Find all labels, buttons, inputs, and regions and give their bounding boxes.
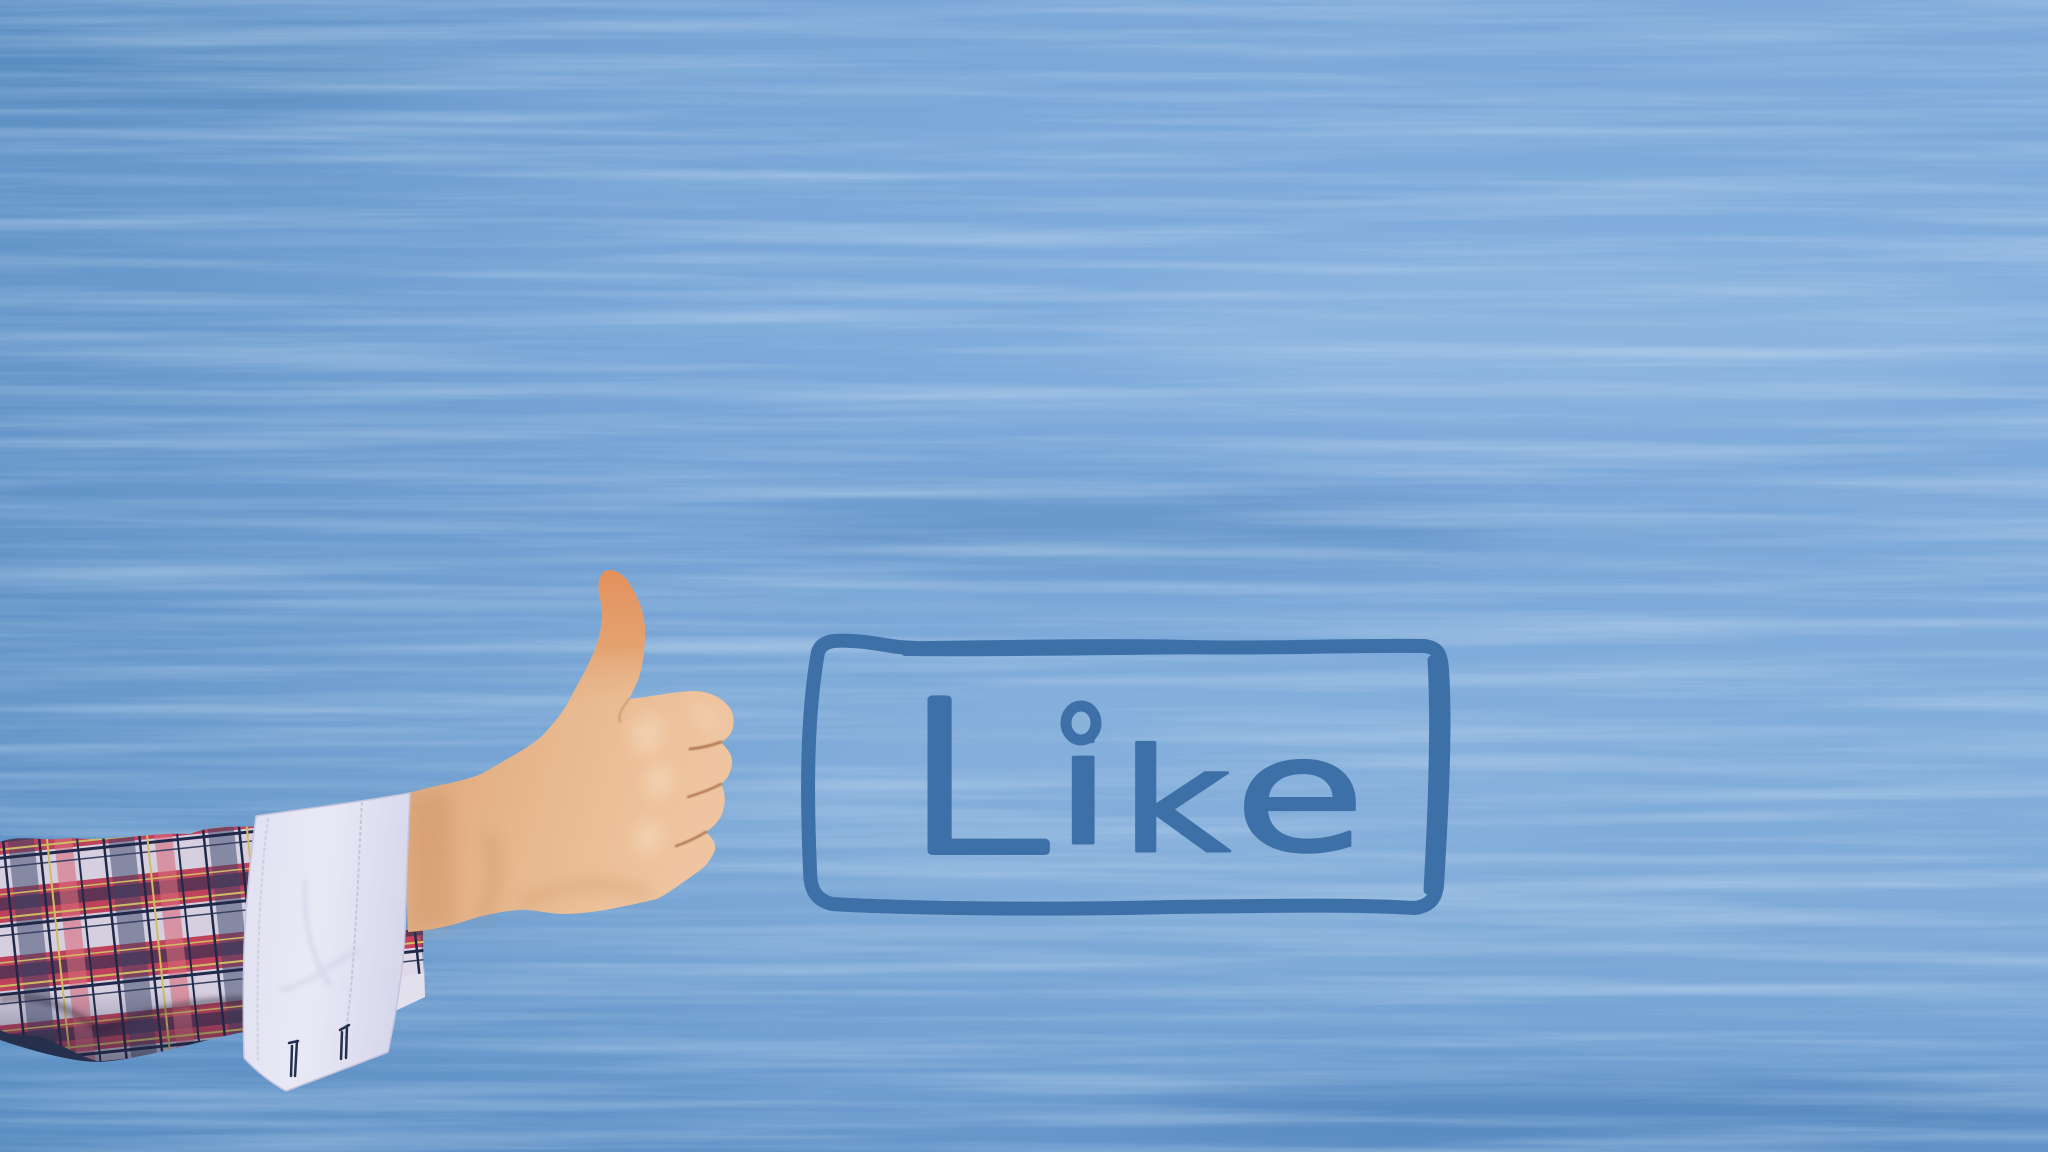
finger creases and knuckles: [619, 699, 721, 846]
button label: k: [1120, 718, 1230, 885]
cuff buttonholes: [289, 1025, 349, 1076]
inner shirt cuff: [393, 930, 425, 1012]
thumb: [565, 570, 645, 709]
white shirt cuff: [243, 793, 410, 1091]
hand-drawn like button: [808, 641, 1443, 909]
hand: [402, 570, 734, 932]
button outline: [808, 641, 1443, 909]
plaid sleeve: [0, 826, 256, 1062]
button label: i: [1054, 698, 1112, 880]
button label: L: [899, 658, 1053, 900]
arm with thumbs up: [0, 570, 734, 1091]
button label: e: [1234, 702, 1365, 888]
ring dot of the letter i: [1066, 706, 1096, 740]
